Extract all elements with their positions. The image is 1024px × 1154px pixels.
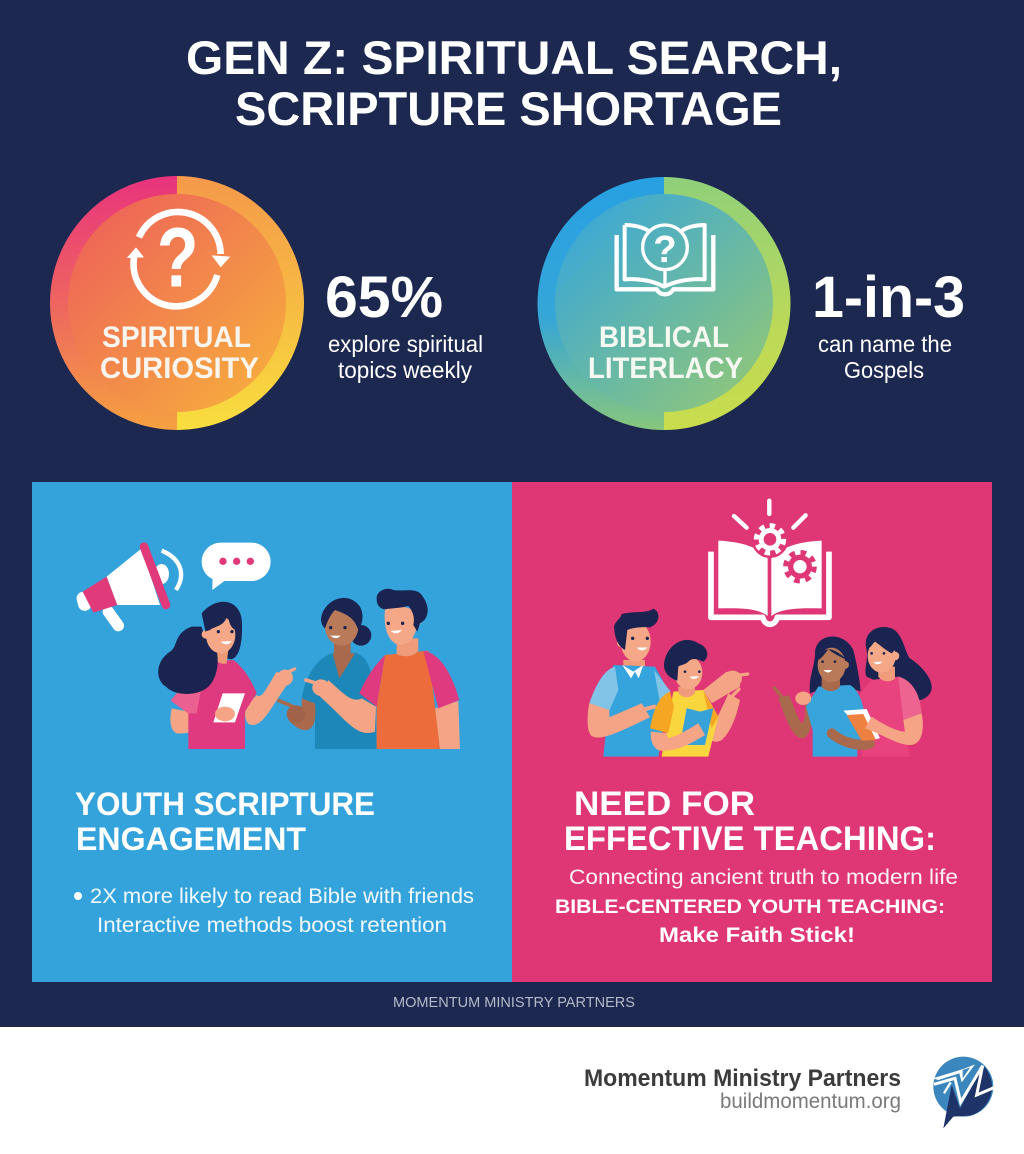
woman in pink (860, 627, 932, 757)
panel heading: EFFECTIVE TEACHING: (564, 820, 936, 858)
panel heading: YOUTH SCRIPTURE (75, 786, 375, 822)
icon: open book with question mark: ? (653, 228, 677, 271)
circle label (100, 321, 259, 385)
circle label: SPIRITUAL (102, 321, 251, 354)
footer band (0, 1027, 1024, 1154)
panel heading (75, 786, 375, 857)
panel body text: Make Faith Stick! (659, 924, 855, 947)
title (186, 31, 842, 135)
icon: question mark with cycle arrows (127, 210, 230, 306)
panel: spiritual curiosity circle (50, 176, 304, 430)
icon: megaphone (75, 547, 181, 626)
illustration: teacher and youth group (588, 609, 932, 757)
title: SCRIPTURE SHORTAGE (235, 82, 782, 135)
panel heading: NEED FOR (574, 785, 755, 823)
girl in blue (774, 637, 923, 757)
panel body text (555, 866, 958, 947)
icon: speech bubble (202, 543, 271, 590)
panel: biblical literacy circle (538, 177, 790, 430)
woman in pink (158, 602, 295, 749)
panel: youth scripture engagement (32, 482, 512, 982)
boy in yellow (650, 640, 740, 757)
panel body text: 2X more likely to read Bible with friends (90, 885, 474, 908)
icon: question mark with cycle arrows: ? (157, 210, 198, 305)
circle label: CURIOSITY (100, 352, 259, 385)
man in vest (588, 609, 748, 757)
icon: momentum logo (933, 1057, 994, 1128)
circle label: BIBLICAL (599, 321, 729, 354)
circle label (588, 321, 743, 385)
panel heading (564, 785, 936, 858)
stat: 65%: topics weekly (338, 357, 472, 383)
stat: 1-in-3 (812, 265, 965, 383)
stat: 65% (325, 265, 483, 383)
illustration: three young people talking (158, 589, 460, 749)
footer url: buildmomentum.org (720, 1090, 901, 1113)
icon: open book with gears (711, 501, 829, 624)
stat: 1-in-3: can name the (818, 331, 952, 357)
title: GEN Z: SPIRITUAL SEARCH, (186, 31, 842, 84)
panel heading: ENGAGEMENT (76, 821, 306, 857)
panel body text: BIBLE-CENTERED YOUTH TEACHING: (555, 897, 945, 918)
panel body text: Interactive methods boost retention (97, 914, 447, 937)
stat: 1-in-3: 1-in-3 (812, 265, 965, 330)
stat: 65%: 65% (325, 265, 443, 330)
icon: open book with question mark (617, 225, 713, 294)
panel body text (74, 885, 474, 937)
panel body text: Connecting ancient truth to modern life (569, 866, 958, 889)
circle label: LITERLACY (588, 352, 743, 385)
panel: need for effective teaching (512, 482, 992, 982)
credit line: MOMENTUM MINISTRY PARTNERS (393, 994, 635, 1011)
man in orange (306, 589, 460, 749)
woman in teal (279, 598, 377, 749)
footer organisation name: Momentum Ministry Partners (584, 1065, 901, 1092)
stat: 65%: explore spiritual (328, 331, 483, 357)
stat: 1-in-3: Gospels (844, 357, 924, 383)
